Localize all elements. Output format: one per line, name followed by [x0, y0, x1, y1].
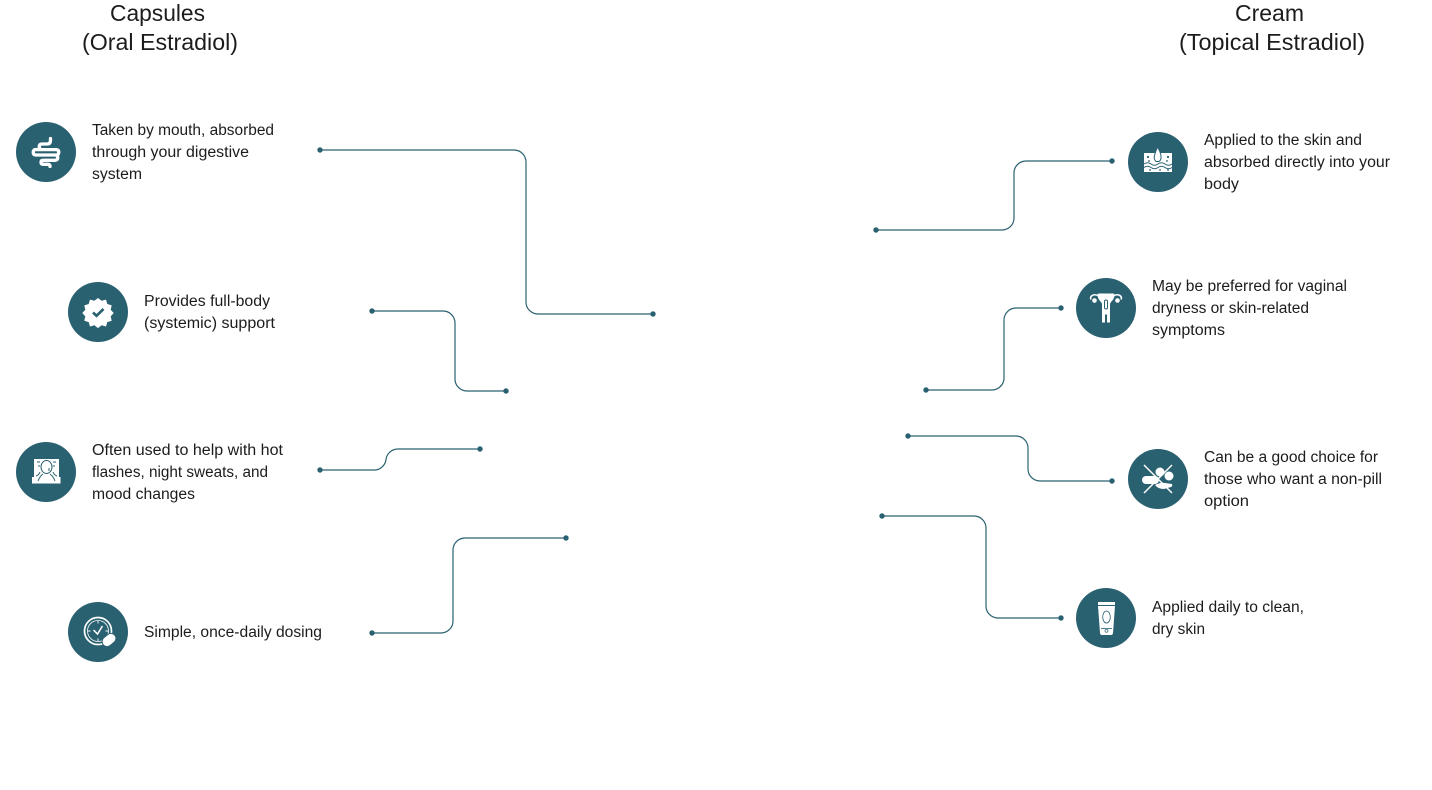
icon: night sweats — [16, 442, 76, 502]
connector: daily dosing — [369, 535, 569, 636]
text: applied to the skin: Applied to the skin and — [1204, 132, 1362, 149]
text: applied daily: dry skin — [1152, 621, 1205, 638]
text: vaginal dryness: symptoms — [1152, 322, 1225, 339]
connector: skin — [873, 158, 1115, 233]
text: taken by mouth: through your digestive — [92, 144, 249, 161]
text: vaginal dryness — [1152, 278, 1347, 339]
text: applied to the skin: absorbed directly into your — [1204, 154, 1390, 171]
icon: intestine — [16, 122, 76, 182]
text: vaginal dryness: May be preferred for vaginal — [1152, 278, 1347, 295]
icon: cream tube — [1076, 588, 1136, 648]
text: non-pill option: Can be a good choice for — [1204, 449, 1378, 466]
text: hot flashes — [92, 442, 284, 503]
text: once-daily dosing: Simple, once-daily dosing — [144, 624, 322, 641]
text: applied daily: Applied daily to clean, — [1152, 599, 1304, 616]
text: non-pill option — [1204, 449, 1382, 510]
text: applied to the skin — [1204, 132, 1390, 193]
text: taken by mouth: Taken by mouth, absorbed — [92, 122, 274, 139]
text: hot flashes: Often used to help with hot — [92, 442, 284, 459]
heading: capsules — [82, 0, 238, 55]
icon: clock and pill — [68, 602, 128, 662]
heading: capsules: (Oral Estradiol) — [82, 29, 238, 55]
text: taken by mouth: system — [92, 166, 142, 183]
text: hot flashes: flashes, night sweats, and — [92, 464, 268, 481]
connector: non-pill — [905, 433, 1115, 484]
text: vaginal dryness: dryness or skin-related — [1152, 300, 1309, 317]
connector: systemic support — [369, 308, 509, 394]
icon: no pills — [1128, 449, 1188, 509]
text: applied to the skin: body — [1204, 176, 1239, 193]
connector: digestive — [317, 147, 656, 317]
text: hot flashes: mood changes — [92, 486, 195, 503]
text: applied daily — [1152, 599, 1304, 638]
text: taken by mouth — [92, 122, 274, 183]
icon: badge check — [68, 282, 128, 342]
heading: cream: (Topical Estradiol) — [1179, 29, 1365, 55]
text: full-body support — [144, 293, 276, 332]
text: non-pill option: option — [1204, 493, 1249, 510]
text: full-body support: Provides full-body — [144, 293, 270, 310]
connector: clean dry skin — [879, 513, 1064, 621]
icon: skin layers — [1128, 132, 1188, 192]
text: full-body support: (systemic) support — [144, 315, 276, 332]
connector: hot flashes — [317, 446, 483, 473]
heading: cream — [1179, 0, 1365, 55]
heading: cream: Cream — [1235, 0, 1304, 26]
text: non-pill option: those who want a non-pill — [1204, 471, 1382, 488]
heading: capsules: Capsules — [110, 0, 205, 26]
connector: vaginal dryness — [923, 305, 1064, 393]
icon: uterus — [1076, 278, 1136, 338]
